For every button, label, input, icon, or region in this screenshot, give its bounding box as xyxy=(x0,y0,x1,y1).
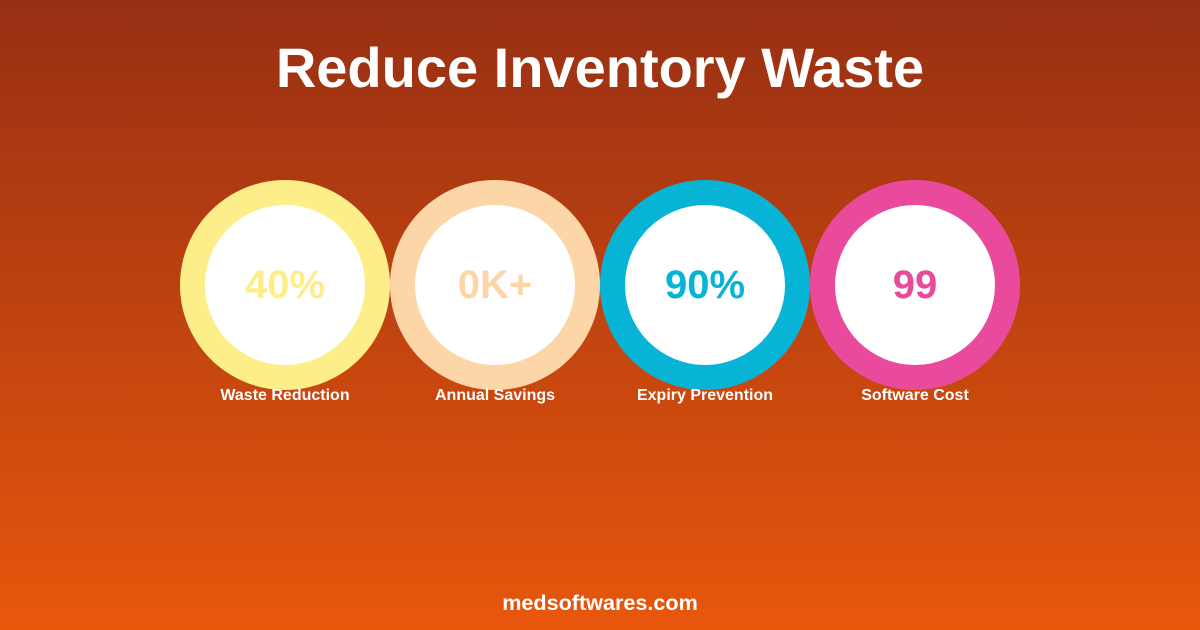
footer: medsoftwares.com xyxy=(502,590,698,615)
stat: annual savings xyxy=(390,180,600,390)
label: waste reduction: Waste Reduction xyxy=(220,387,350,404)
stat: annual savings: 0K+ xyxy=(458,263,532,307)
stat: expiry prevention: 90% xyxy=(665,263,745,307)
stat: expiry prevention xyxy=(600,180,810,390)
label: annual savings: Annual Savings xyxy=(435,387,555,404)
label: software cost: Software Cost xyxy=(861,387,969,404)
stat: waste reduction xyxy=(180,180,390,390)
title: Reduce Inventory Waste xyxy=(276,36,924,99)
stat: software cost: 99 xyxy=(893,263,937,307)
stat: waste reduction: 40% xyxy=(245,263,325,307)
label: expiry prevention: Expiry Prevention xyxy=(637,387,773,404)
stat: software cost xyxy=(810,180,1020,390)
